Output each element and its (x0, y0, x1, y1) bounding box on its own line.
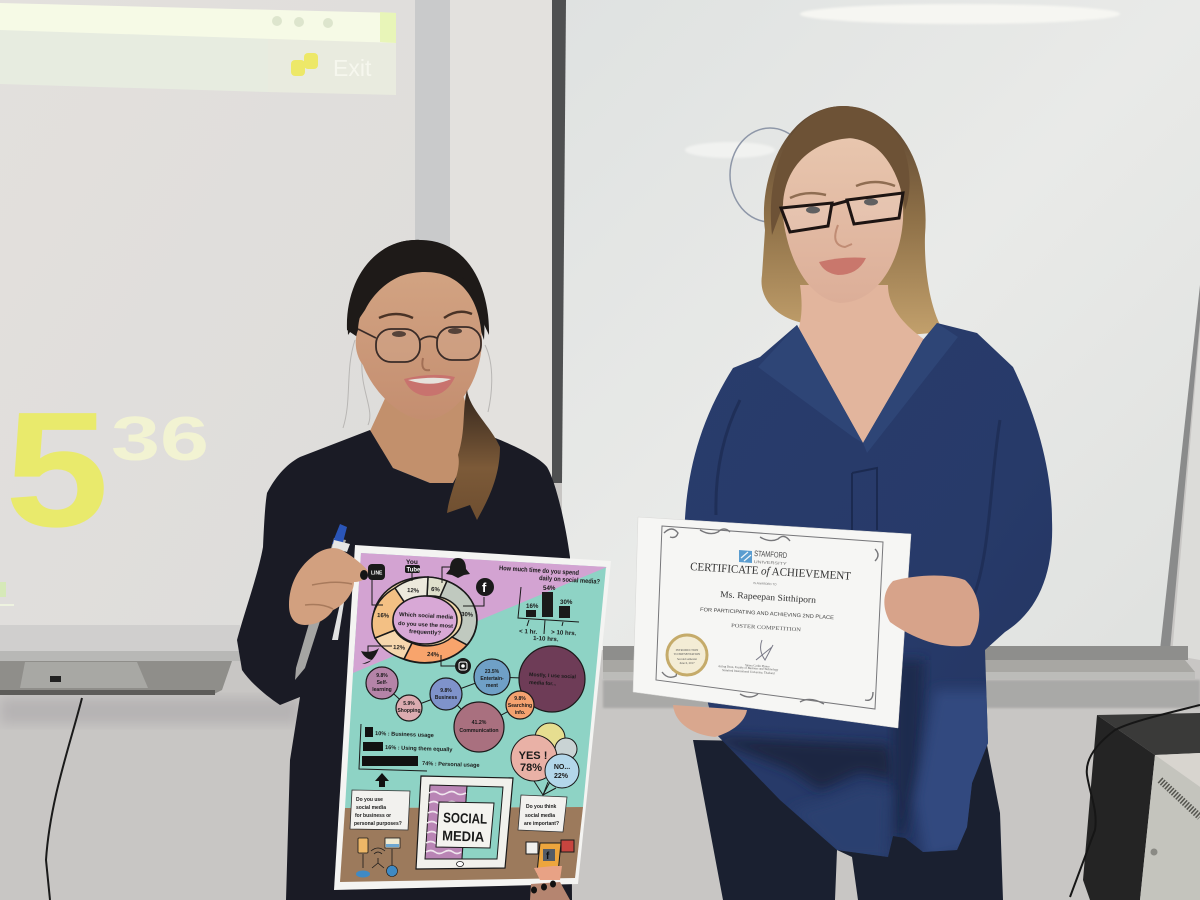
time-spent bar chart: 16% (526, 603, 539, 610)
donut labels: 6% (431, 587, 441, 593)
left woman eyebrows (379, 312, 472, 318)
time-spent heading: How much time do you spend (499, 565, 579, 577)
bubble: entertainment: ment (486, 683, 498, 689)
left woman's fingers under poster (530, 880, 570, 900)
bubble: shopping: 5.9% (403, 701, 415, 707)
poster teal background (345, 553, 606, 808)
social media label: MEDIA (442, 827, 484, 845)
right woman's upper hand (884, 576, 979, 646)
icon: YouTube: You (406, 559, 418, 566)
bubble: searching info: info. (515, 710, 526, 716)
time-spent bar chart: > 10 hrs. (551, 629, 577, 637)
donut labels: 16% (377, 613, 390, 620)
tablet (416, 776, 513, 869)
signatory: Sjoerz Carlin Plomo (745, 663, 770, 669)
university name: UNIVERSITY (754, 559, 787, 566)
poster brown ground (340, 807, 583, 882)
left woman stray hair (343, 340, 492, 428)
network icons (356, 838, 400, 878)
signature (756, 640, 773, 660)
slide score small digits: 36 (111, 405, 209, 474)
left woman smile with braces (404, 375, 455, 396)
bubble: self-learning: Self- (377, 680, 388, 686)
bubble: business: 9.8% (440, 688, 452, 694)
question box: business or personal: personal purposes? (354, 821, 402, 827)
donut labels: 24% (427, 652, 440, 659)
right woman back hair (761, 106, 944, 335)
balloon yes label: YES ! (519, 750, 547, 762)
right woman blue shirt (684, 323, 1052, 857)
slide exit label: Exit (333, 55, 372, 81)
question box: business or personal (350, 790, 410, 830)
right woman eyebrows (790, 182, 895, 198)
left woman eyes (392, 328, 462, 337)
recipient name: Ms. Rapeepan Sitthiporn (720, 589, 817, 605)
right woman neck and chest (795, 285, 925, 445)
bubble: shopping: Shopping (397, 708, 421, 714)
time-spent bar chart: 54% (543, 585, 556, 592)
icon: Facebook: f (482, 580, 487, 595)
bubble: self-learning (366, 667, 398, 699)
left woman face (356, 272, 482, 420)
bubble: entertainment (474, 659, 510, 695)
question box: business or personal: social media (356, 805, 386, 811)
bubble: searching info: Searching (508, 703, 532, 709)
question box: business or personal: Do you use (356, 797, 383, 803)
donut labels: 12% (393, 645, 406, 652)
left woman neck (370, 392, 478, 483)
phone in hand icon: f (546, 851, 550, 862)
certificate ornate frame (656, 526, 883, 709)
time-spent bar chart (518, 585, 579, 643)
right woman nose (835, 225, 852, 247)
donut labels: frequently? (409, 629, 442, 637)
bubble: self-learning: 9.8% (376, 673, 388, 679)
gold seal: June 6, 2017 (679, 661, 695, 666)
computer unit (1070, 705, 1200, 900)
arrow up (375, 773, 389, 787)
phone in hand icon (526, 840, 574, 880)
question box: importance: Do you think (526, 804, 556, 810)
bubble: entertainment: Entertain- (480, 676, 504, 682)
projector ledge (0, 651, 300, 724)
icon connectors (368, 567, 484, 666)
competition line: POSTER COMPETITION (731, 623, 801, 633)
right woman collar (758, 323, 958, 453)
time-spent bar chart: 30% (560, 599, 573, 606)
person: woman on the right (684, 106, 1052, 900)
whiteboard sketch circle (730, 128, 810, 222)
right woman trousers (693, 740, 1003, 900)
certificate paper (633, 517, 911, 728)
donut chart (372, 577, 477, 663)
achievement line: FOR PARTICIPATING AND ACHIEVING 2ND PLACE (700, 607, 835, 621)
bubble: searching info (506, 691, 534, 719)
right woman glasses (781, 193, 903, 232)
certificate (633, 517, 911, 728)
bubble: self-learning: learning (372, 687, 392, 693)
left woman glasses (358, 327, 481, 362)
left woman nose (422, 358, 430, 370)
social media label: SOCIAL (443, 809, 488, 827)
icon: YouTube: Tube (406, 568, 421, 574)
signatory (718, 663, 779, 676)
social media label (436, 802, 494, 848)
bubble: searching info: 9.8% (514, 696, 526, 702)
balloon no label: NO... (554, 764, 570, 771)
donut labels: 30% (461, 612, 474, 619)
icon: LINE: LINE (371, 570, 383, 576)
slide score big digit: 5 (5, 378, 109, 561)
bubble: communication: Communication (459, 728, 499, 734)
icon: Snapchat (446, 558, 470, 578)
signatory: Stamford International University, Thailand (722, 668, 775, 676)
right woman mouth (819, 258, 866, 275)
time-spent heading (499, 565, 600, 586)
question box: importance: are important? (524, 821, 559, 827)
right woman shirt folds (716, 400, 1000, 600)
question box: business or personal: for business or (355, 813, 391, 819)
donut labels: Which social media (399, 612, 454, 621)
time-spent bar chart: < 1 hr. (519, 628, 538, 636)
poster (334, 545, 611, 890)
donut labels (377, 587, 474, 659)
usage bar chart (359, 724, 480, 771)
bubble: entertainment: 23.5% (485, 669, 500, 675)
poster pink triangle (353, 553, 607, 673)
bubble: shopping (396, 695, 422, 721)
icon: Instagram (455, 658, 471, 674)
bubble: communication (454, 702, 504, 752)
balloon no label (554, 764, 570, 780)
icon: Facebook (476, 578, 494, 596)
pen in left woman's hand (295, 524, 350, 680)
left woman hair strip (348, 240, 489, 335)
right woman's lower hand (673, 705, 747, 737)
bubble connectors (382, 677, 552, 727)
icon: YouTube (405, 559, 421, 574)
university name (754, 549, 788, 566)
balloons (511, 723, 579, 795)
left woman's hand gripping poster (289, 548, 368, 625)
projector screen (0, 0, 415, 652)
whiteboard (552, 0, 1200, 660)
balloon no label: 22% (554, 773, 569, 780)
icon: LINE (368, 564, 385, 580)
left woman black top (237, 430, 572, 900)
balloon yes label (519, 750, 547, 774)
upper wall and pillar (415, 0, 556, 660)
gold seal (667, 635, 707, 675)
time-spent bar chart: 1-10 hrs. (533, 635, 559, 643)
right woman shirt placket (852, 468, 877, 530)
bubble: mostly: media for... (529, 680, 557, 687)
donut labels: 12% (407, 588, 420, 595)
left woman hair (347, 240, 484, 340)
bubble: mostly: Mostly, I use social (529, 672, 577, 680)
bubble: business (430, 678, 462, 710)
gold seal: Second semester (677, 657, 697, 661)
person: woman on the left (237, 240, 572, 900)
right woman face (782, 138, 903, 303)
bubble: mostly (519, 646, 585, 712)
icon: browser toolbar symbols (272, 16, 333, 28)
awarded to: IS AWARDED TO (753, 581, 777, 586)
right woman eyes (806, 198, 878, 214)
wall cable (46, 698, 82, 900)
time-spent heading: daily on social media? (539, 575, 600, 586)
left woman ponytail (447, 390, 500, 520)
certificate logo (739, 550, 752, 563)
right woman shirt lower shading (700, 660, 995, 860)
gold seal: INTRODUCTION (676, 648, 699, 652)
signatory: Acting Dean, Faculty of Business and Technology (718, 664, 779, 673)
usage bar chart: 74% : Personal usage (422, 761, 480, 769)
whiteboard tray (603, 646, 1200, 708)
question box: importance: social media (525, 813, 555, 819)
poster paper (334, 545, 611, 890)
question box: importance (518, 795, 567, 832)
balloon yes label: 78% (520, 762, 542, 774)
university name: STAMFORD (754, 549, 788, 560)
gold seal: TO PRESENTATION (674, 652, 701, 656)
donut labels: do you use the most (398, 621, 453, 630)
certificate title: CERTIFICATE of ACHIEVEMENT (690, 561, 851, 583)
bubble: business: Business (435, 695, 457, 701)
icon: Twitter (361, 648, 379, 664)
right woman fringe (771, 106, 910, 235)
usage bar chart: 10% : Business usage (375, 731, 434, 739)
usage bar chart: 16% : Using them equally (385, 745, 453, 753)
bubble: communication: 41.2% (472, 720, 487, 726)
icon: python logo on slide (291, 53, 318, 76)
